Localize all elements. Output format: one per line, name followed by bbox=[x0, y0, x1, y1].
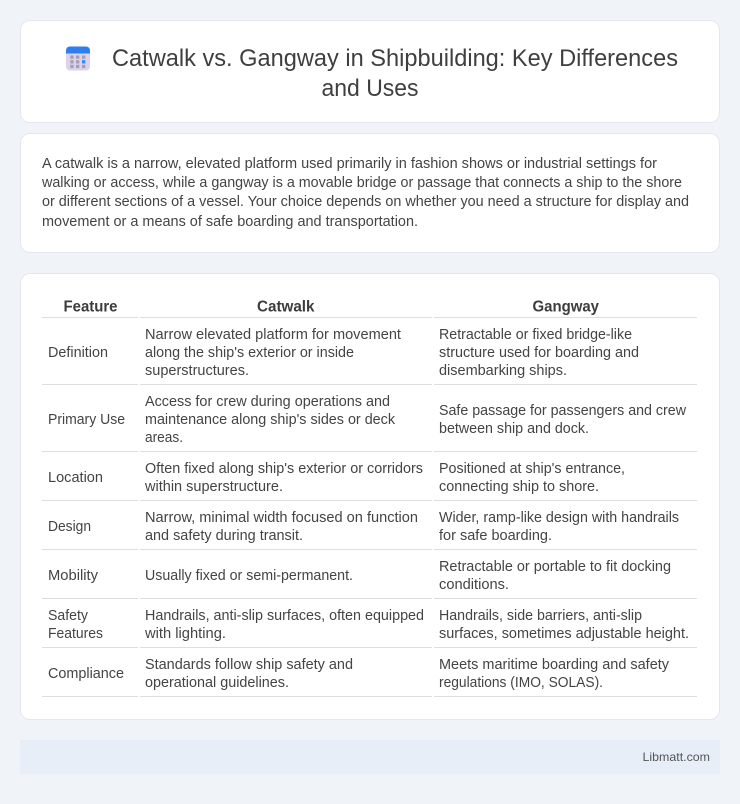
row: definition: disembarking ships. bbox=[439, 363, 567, 379]
row: primary use: areas. bbox=[145, 430, 183, 446]
row: compliance: regulations (IMO, SOLAS). bbox=[439, 675, 603, 691]
footer bbox=[20, 740, 720, 774]
row: design: and safety during transit. bbox=[145, 528, 303, 544]
table header: Feature bbox=[64, 298, 118, 316]
row: mobility bbox=[42, 559, 697, 599]
row: compliance: Standards follow ship safety and bbox=[145, 657, 353, 673]
intro text: or different sections of a vessel. Your choice depends on whether you need a structure for display and bbox=[42, 194, 689, 210]
row: compliance bbox=[42, 657, 697, 697]
row: location: Location bbox=[48, 470, 103, 486]
row: mobility: conditions. bbox=[439, 577, 509, 593]
row: safety features: with lighting. bbox=[144, 626, 226, 642]
row: compliance: Compliance bbox=[48, 666, 124, 682]
row: location: Often fixed along ship's exterior or corridors bbox=[145, 461, 423, 477]
row: safety features: Handrails, side barriers, anti-slip bbox=[439, 608, 642, 624]
row: primary use: Safe passage for passengers and crew bbox=[439, 403, 687, 419]
intro text: movement or a means of safe boarding and transportation. bbox=[42, 214, 418, 230]
panel: title card bbox=[20, 20, 720, 122]
row: design: for safe boarding. bbox=[439, 528, 552, 544]
row: primary use: between ship and dock. bbox=[439, 421, 589, 437]
row: safety features: Features bbox=[48, 626, 103, 642]
row: mobility: Mobility bbox=[48, 568, 99, 584]
row: location: Positioned at ship's entrance, bbox=[439, 461, 625, 477]
row: mobility: Usually fixed or semi-permanent. bbox=[145, 568, 353, 584]
row: design: Design bbox=[48, 519, 91, 535]
row: design bbox=[42, 510, 697, 550]
row: definition: Definition bbox=[48, 345, 108, 361]
row: location: within superstructure. bbox=[144, 479, 283, 495]
row: design: Wider, ramp-like design with handrails bbox=[439, 510, 679, 526]
table header: Catwalk bbox=[257, 298, 315, 316]
row: design: Narrow, minimal width focused on function bbox=[145, 510, 418, 526]
row: definition: Narrow elevated platform for movement bbox=[145, 327, 401, 343]
panel: introduction bbox=[20, 134, 720, 252]
row: definition: superstructures. bbox=[145, 363, 249, 379]
row: safety features: Handrails, anti-slip surfaces, often equipped bbox=[145, 608, 424, 624]
row: definition: structure used for boarding and bbox=[439, 345, 639, 361]
row: compliance: Meets maritime boarding and safety bbox=[439, 657, 670, 673]
title: Catwalk vs. Gangway in Shipbuilding: Key Differences bbox=[112, 45, 678, 72]
footer credit: Libmatt.com bbox=[642, 750, 710, 764]
row: definition: Retractable or fixed bridge-like bbox=[439, 327, 632, 343]
icon: calendar bbox=[66, 46, 90, 70]
row: mobility: Retractable or portable to fit docking bbox=[439, 559, 671, 575]
panel: comparison table bbox=[20, 274, 720, 720]
row: primary use: Primary Use bbox=[48, 412, 125, 428]
intro text: walking or access, while a gangway is a movable bridge or passage that connects a ship to the shore bbox=[41, 175, 682, 191]
intro text bbox=[41, 156, 689, 230]
title: and Uses bbox=[322, 75, 418, 102]
row: primary use bbox=[42, 394, 697, 452]
table header bbox=[42, 298, 697, 318]
row: definition: along the ship's exterior or inside bbox=[145, 345, 354, 361]
intro text: A catwalk is a narrow, elevated platform used primarily in fashion shows or industrial settings for bbox=[42, 156, 657, 172]
row: primary use: Access for crew during operations and bbox=[145, 394, 390, 410]
row: location: connecting ship to shore. bbox=[439, 479, 599, 495]
row: definition bbox=[42, 327, 697, 385]
row: primary use: maintenance along ship's sides or deck bbox=[145, 412, 396, 428]
row: safety features bbox=[42, 608, 697, 648]
row: compliance: operational guidelines. bbox=[145, 675, 289, 691]
row: safety features: surfaces, sometimes adjustable height. bbox=[439, 626, 689, 642]
row: safety features: Safety bbox=[48, 608, 89, 624]
title bbox=[112, 45, 678, 102]
row: location bbox=[42, 461, 697, 501]
table header: Gangway bbox=[532, 298, 599, 316]
